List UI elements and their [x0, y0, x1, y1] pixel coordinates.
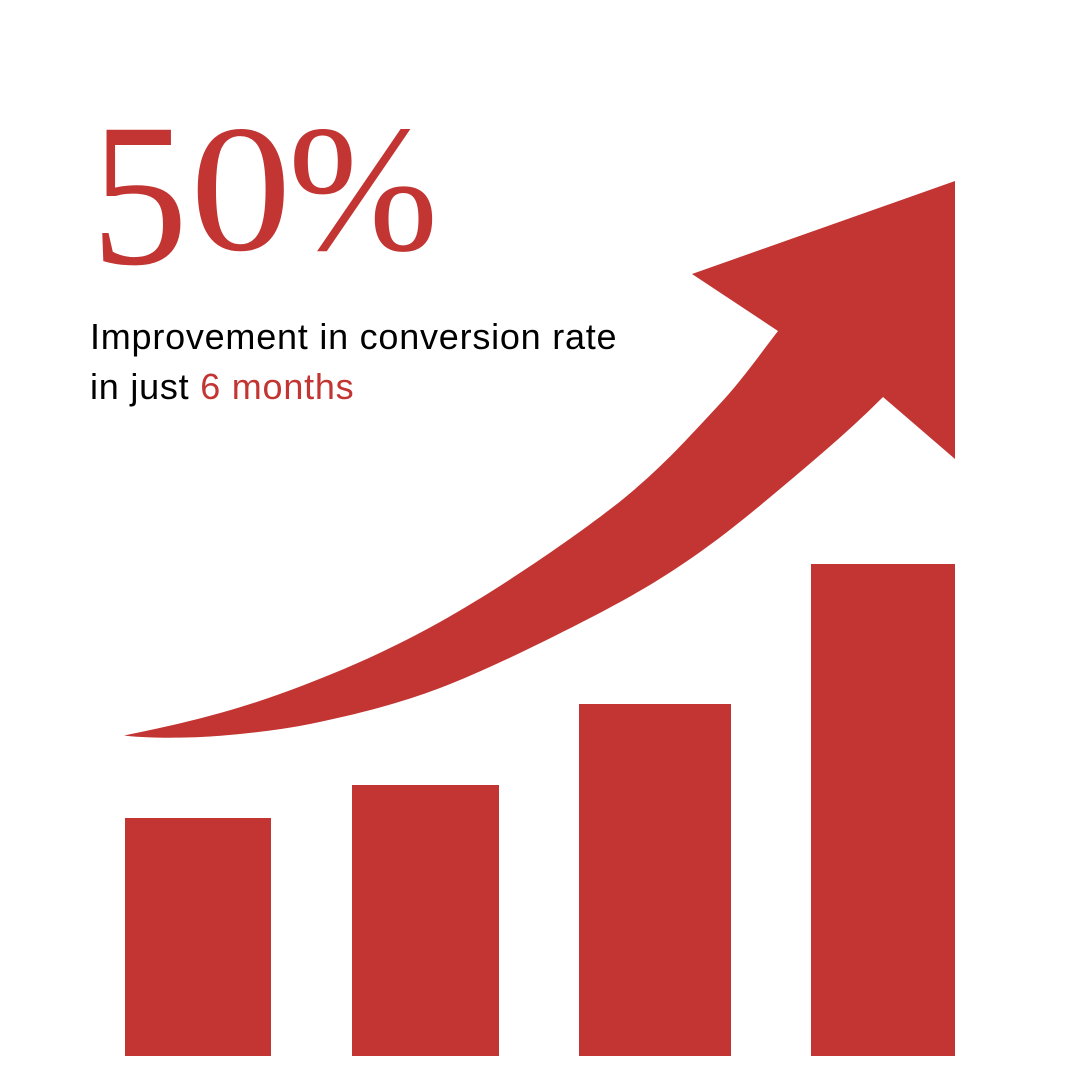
big number: 50%: % — [288, 88, 438, 289]
big number: 50%: 5 — [91, 82, 188, 308]
icon: rising arrow — [124, 181, 955, 738]
bar 1 — [125, 818, 271, 1056]
bar 2 — [352, 785, 499, 1056]
text block: improvement description — [90, 316, 617, 407]
big number: 50%: 0 — [190, 88, 292, 289]
text block: improvement description: Improvement in conversion rate — [90, 316, 617, 357]
big number: 50% — [91, 82, 438, 308]
bar 4 — [811, 564, 955, 1056]
bar 3 — [579, 704, 731, 1056]
text block: improvement description: in just 6 months — [90, 366, 354, 407]
